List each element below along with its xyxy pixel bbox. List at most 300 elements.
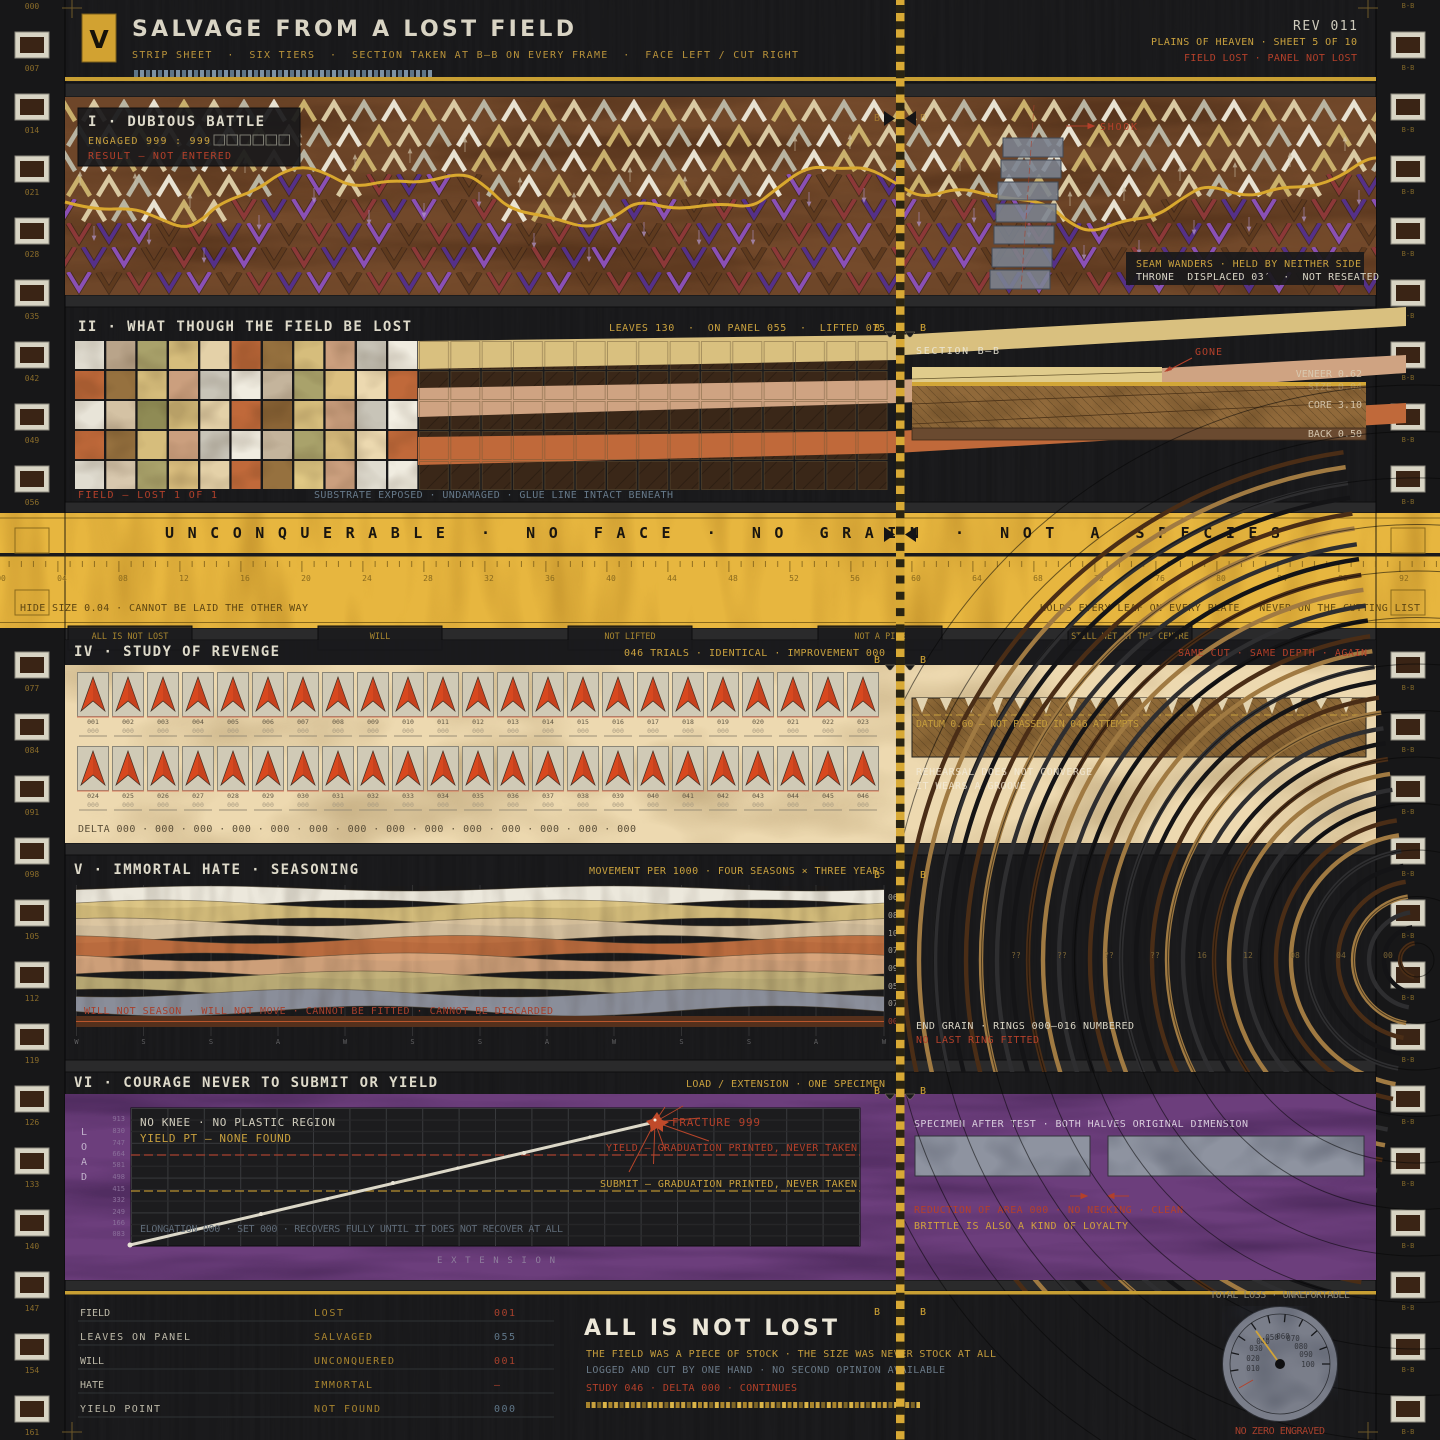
trial cards row 2: 039 (612, 792, 624, 800)
trial cards row 2: 000 (857, 801, 869, 809)
band: white stock (76, 886, 884, 908)
ring numbers: ?? (1057, 951, 1067, 960)
trial cards row 1: 011 (437, 718, 449, 726)
datum note: DATUM 0.60 — NOT PASSED IN 046 ATTEMPTS (916, 719, 1139, 730)
ledger table: YIELD POINT (80, 1404, 160, 1415)
trial cards row 2: 042 (717, 792, 729, 800)
ruler: 52 (789, 574, 799, 583)
trial cards row 1: 000 (472, 727, 484, 735)
right film strip: B-B (1402, 994, 1414, 1002)
trial cards row 2: 000 (717, 801, 729, 809)
left film strip: 119 (25, 1056, 39, 1065)
icon: V tile: V (89, 25, 109, 54)
load scale: 747 (112, 1139, 125, 1147)
trial cards row 2: 000 (157, 801, 169, 809)
trial cards row 1: 000 (367, 727, 379, 735)
veneer tile grid (75, 341, 417, 489)
banner statement: UNCONQUERABLE · NO FACE · NO GRAIN · NOT A SPECIES (165, 524, 1280, 542)
trial cards row 2: 000 (332, 801, 344, 809)
right film strip: B-B (1402, 312, 1414, 320)
section seam B-B (896, 0, 904, 1440)
season letters: A (276, 1038, 281, 1046)
extension axis label: E X T E N S I O N (437, 1256, 555, 1266)
seam note box: THRONE DISPLACED 03′ · NOT RESEATED (1136, 272, 1379, 283)
trial cards row 2: 029 (262, 792, 274, 800)
load scale: 332 (112, 1196, 125, 1204)
lifted strip: blush (418, 355, 1406, 417)
trial cards row 1: 023 (857, 718, 869, 726)
trial cards row 2: 036 (507, 792, 519, 800)
ring numbers: 08 (1290, 951, 1300, 960)
closing line 1: THE FIELD WAS A PIECE OF STOCK · THE SIZE WAS NEVER STOCK AT ALL (586, 1349, 996, 1360)
band end values: 063 (888, 893, 903, 902)
left film strip: 035 (25, 312, 39, 321)
trial cards row 2: 000 (472, 801, 484, 809)
left film strip: 161 (25, 1428, 39, 1437)
trial cards row 2: 000 (787, 801, 799, 809)
shook callout: SHOOK (1100, 122, 1137, 133)
ledger table: 001 (494, 1356, 515, 1367)
right film strip: B-B (1402, 1056, 1414, 1064)
subtitle: STRIP SHEET · SIX TIERS · SECTION TAKEN AT B—B ON EVERY FRAME · FACE LEFT / CUT RIGHT (132, 50, 798, 61)
trial cards row 1: 000 (262, 727, 274, 735)
specimen note: SPECIMEN AFTER TEST · BOTH HALVES ORIGINAL DIMENSION (914, 1119, 1248, 1130)
ledger table (78, 1308, 554, 1417)
barcode (134, 70, 434, 77)
ruler: 64 (972, 574, 982, 583)
load scale: 581 (112, 1161, 125, 1169)
trial cards row 1: 000 (192, 727, 204, 735)
ring numbers: ?? (1104, 951, 1114, 960)
yield line: YIELD — GRADUATION PRINTED, NEVER TAKEN (606, 1143, 857, 1154)
season letters: S (679, 1038, 684, 1046)
trial cards row 1: 002 (122, 718, 134, 726)
panel: V immortal hate seasoning: 056 (888, 982, 903, 991)
trial cards row 1 (77, 672, 879, 736)
ledger table: WILL (80, 1356, 104, 1367)
closing title: ALL IS NOT LOST (584, 1316, 837, 1341)
band: gold stock (76, 900, 884, 926)
panel: VI courage never to submit or yield (65, 1075, 1376, 1280)
panel: V immortal hate seasoning: 084 (888, 911, 903, 920)
tabs under the gold band: ALL IS NOT LOST (92, 632, 168, 642)
trial cards row 1: 000 (752, 727, 764, 735)
end grain note: END GRAIN · RINGS 000—016 NUMBERED (916, 1021, 1134, 1032)
ledger table: LOST (314, 1308, 343, 1319)
fracture burst (629, 1106, 709, 1172)
ruler: 84 (1277, 574, 1287, 583)
ledger table: UNCONQUERED (314, 1356, 394, 1367)
section markers B-B: B (920, 113, 926, 124)
closing line 3: STUDY 046 · DELTA 000 · CONTINUES (586, 1383, 797, 1394)
title box: ENGAGED 999 : 999 (88, 136, 210, 147)
ruler: 72 (1094, 574, 1104, 583)
trial cards row 2: 027 (192, 792, 204, 800)
tabs under the gold band: WILL (370, 632, 390, 642)
right film strip: B-B (1402, 1242, 1414, 1250)
gutters between tiers (65, 83, 1376, 1291)
trial cards row 2: 000 (192, 801, 204, 809)
trial cards row 1: 008 (332, 718, 344, 726)
trial cards row 1: 021 (787, 718, 799, 726)
ruler: 28 (423, 574, 433, 583)
section label: SECTION B—B (916, 346, 999, 357)
section markers B-B: B (874, 113, 880, 124)
brittle note: BRITTLE IS ALSO A KIND OF LOYALTY (914, 1221, 1128, 1232)
no zero note: NO ZERO ENGRAVED (1235, 1426, 1325, 1437)
trial cards row 1: 012 (472, 718, 484, 726)
icon: V tile (82, 14, 116, 62)
load scale: 415 (112, 1185, 125, 1193)
panel: V immortal hate seasoning: 098 (888, 964, 903, 973)
trial cards row 1: 005 (227, 718, 239, 726)
trial cards row 2: 044 (787, 792, 799, 800)
load extension chart: YIELD PT — NONE FOUND (140, 1132, 291, 1145)
ledger table: HATE (80, 1380, 104, 1391)
trial cards row 2: 025 (122, 792, 134, 800)
ruler: 60 (911, 574, 921, 583)
end grain rings (904, 450, 1415, 1291)
load scale: 913 (112, 1115, 125, 1123)
trial cards row 1: 000 (612, 727, 624, 735)
band: copper stock (76, 935, 884, 960)
trial cards row 1: 000 (332, 727, 344, 735)
section through the panel: CORE 3.10 (1308, 400, 1362, 411)
trial cards row 2: 000 (87, 801, 99, 809)
panel stats: LEAVES 130 · ON PANEL 055 · LIFTED 075 (609, 323, 885, 334)
panel: V immortal hate seasoning: 077 (888, 946, 903, 955)
gauge: 040 (1256, 1337, 1270, 1346)
rehearsal note: REHEARSAL DOES NOT CONVERGE (916, 767, 1092, 778)
section markers B-B: B (874, 1307, 880, 1318)
section through the panel: SIZE 0.04 (1308, 382, 1362, 393)
load extension chart (128, 1106, 860, 1248)
trial cards row 2: 000 (682, 801, 694, 809)
repeat note: SAME CUT · SAME DEPTH · AGAIN (1178, 648, 1367, 659)
ruler: 16 (240, 574, 250, 583)
season letters: W (882, 1038, 887, 1046)
throne stack of blocks (990, 105, 1063, 290)
load axis label: L (81, 1127, 87, 1138)
revision block (1151, 19, 1357, 64)
thin ring circles (904, 384, 1440, 1440)
left film strip: 021 (25, 188, 39, 197)
header rule (65, 77, 1376, 81)
ledger table: SALVAGED (314, 1332, 372, 1343)
trial cards row 2: 037 (542, 792, 554, 800)
trial cards row 1: 000 (157, 727, 169, 735)
gauge: 070 (1286, 1334, 1300, 1343)
gauge: 020 (1246, 1354, 1260, 1363)
ledger table: 055 (494, 1332, 515, 1343)
no last ring note: NO LAST RING FITTED (916, 1035, 1039, 1046)
trial cards row 1: 000 (507, 727, 519, 735)
panel: I dubious battle (65, 97, 1379, 295)
trial cards row 2: 000 (437, 801, 449, 809)
ruler: 12 (179, 574, 189, 583)
rehearsal note: IT WEARS A GROOVE (916, 781, 1026, 792)
ghost sprocket holes (15, 528, 1425, 615)
shook callout (1066, 122, 1137, 133)
ruler: 92 (1399, 574, 1409, 583)
ruler: 08 (118, 574, 128, 583)
trial cards row 1: 000 (787, 727, 799, 735)
right film strip: B-B (1402, 1118, 1414, 1126)
trial cards row 2: 046 (857, 792, 869, 800)
left film strip: 091 (25, 808, 39, 817)
trial cards row 2: 040 (647, 792, 659, 800)
heading: IV · STUDY OF REVENGE (74, 644, 279, 660)
left film strip: 105 (25, 932, 39, 941)
field lost note: FIELD — LOST 1 OF 1 (78, 490, 217, 501)
wandering seam line (65, 158, 1376, 230)
trial cards row 2: 035 (472, 792, 484, 800)
panel: V immortal hate seasoning (74, 864, 896, 1044)
specimen halves (915, 1136, 1364, 1176)
left film strip: 140 (25, 1242, 39, 1251)
panel: III unconquerable gold band (0, 513, 1440, 628)
season letters: W (612, 1038, 617, 1046)
trial cards row 2: 026 (157, 792, 169, 800)
load axis label: A (81, 1157, 87, 1168)
trial cards row 1: 018 (682, 718, 694, 726)
band: olive stock (76, 970, 884, 993)
gauge (1222, 1306, 1338, 1422)
right film strip: B-B (1402, 250, 1414, 258)
delta readout: DELTA 000 · 000 · 000 · 000 · 000 · 000 · 000 · 000 · 000 · 000 · 000 · 000 · 000 · 000 (78, 824, 636, 835)
left film strip: 098 (25, 870, 39, 879)
gauge: 080 (1294, 1342, 1308, 1351)
section through the panel: VENEER 0.62 (1296, 369, 1362, 380)
right film strip: B-B (1402, 1428, 1414, 1436)
left film strip: 049 (25, 436, 39, 445)
fracture label: FRACTURE 999 (672, 1116, 760, 1129)
right film strip: B-B (1402, 932, 1414, 940)
ring numbers: 04 (1336, 951, 1346, 960)
header (65, 14, 1376, 81)
tally bar (586, 1402, 920, 1408)
trial cards row 1: 019 (717, 718, 729, 726)
trial cards row 1: 004 (192, 718, 204, 726)
lifted strip: gold (418, 307, 1406, 369)
right film strip (1376, 0, 1440, 1440)
ruler (0, 561, 1440, 583)
ledger table: 001 (494, 1308, 515, 1319)
left film strip: 000 (25, 2, 39, 11)
title box: I · DUBIOUS BATTLE (88, 114, 264, 130)
chart notes: NO KNEE · NO PLASTIC REGION (140, 1116, 335, 1129)
trial cards row 2: 000 (122, 801, 134, 809)
season letters: S (747, 1038, 751, 1046)
right film strip: B-B (1402, 436, 1414, 444)
band: steel stock (76, 988, 884, 1016)
tabs under the gold band: NOT LIFTED (604, 632, 656, 642)
heading: VI · COURAGE NEVER TO SUBMIT OR YIELD (74, 1075, 437, 1091)
gauge heading: TOTAL LOSS · UNREPORTABLE (1210, 1290, 1350, 1301)
trial cards row 1: 000 (402, 727, 414, 735)
season letters: A (814, 1038, 819, 1046)
trial cards row 2: 000 (227, 801, 239, 809)
left film strip: 084 (25, 746, 39, 755)
ruler: 56 (850, 574, 860, 583)
trial cards row 2: 000 (402, 801, 414, 809)
trial cards row 1: 022 (822, 718, 834, 726)
seam note box (1126, 252, 1379, 285)
ruler: 80 (1216, 574, 1226, 583)
section markers B-B: B (920, 1307, 926, 1318)
panel: V immortal hate seasoning: 070 (888, 999, 903, 1008)
title box: RESULT — NOT ENTERED (88, 151, 231, 162)
left film strip: 028 (25, 250, 39, 259)
load scale: 249 (112, 1208, 125, 1216)
ledger table: IMMORTAL (314, 1380, 372, 1391)
ledger table: 000 (494, 1404, 515, 1415)
trial cards row 1: 013 (507, 718, 519, 726)
panel: IV study of revenge (65, 640, 1376, 843)
ring numbers: 00 (1383, 951, 1393, 960)
load scale: 166 (112, 1219, 125, 1227)
trial cards row 2: 043 (752, 792, 764, 800)
section markers B-B (874, 111, 926, 1318)
tabs under the gold band: NOT A PILE (854, 632, 906, 642)
section markers B-B: B (874, 870, 880, 881)
right film strip: B-B (1402, 808, 1414, 816)
trial cards row 2: 032 (367, 792, 379, 800)
right film strip: B-B (1402, 2, 1414, 10)
cream field (65, 665, 1376, 843)
trial cards row 2: 000 (752, 801, 764, 809)
trial cards row 1: 006 (262, 718, 274, 726)
gone callout: GONE (1195, 347, 1222, 358)
purple field (65, 1094, 1376, 1280)
section markers B-B: B (874, 655, 880, 666)
trial cards row 2: 000 (647, 801, 659, 809)
gauge: 050 (1265, 1333, 1279, 1342)
gauge: 100 (1301, 1360, 1315, 1369)
trial cards row 2: 034 (437, 792, 449, 800)
trial cards row 2: 028 (227, 792, 239, 800)
right film strip: B-B (1402, 870, 1414, 878)
load axis label: O (81, 1142, 87, 1153)
trial cards row 2: 000 (367, 801, 379, 809)
gauge: 090 (1299, 1350, 1313, 1359)
revision block: REV 011 (1293, 19, 1357, 34)
revision block: FIELD LOST · PANEL NOT LOST (1184, 53, 1357, 64)
ruler: 04 (57, 574, 67, 583)
ledger table: NOT FOUND (314, 1404, 380, 1415)
heading: II · WHAT THOUGH THE FIELD BE LOST (78, 319, 411, 335)
season letters: A (545, 1038, 550, 1046)
trial cards row 2: 038 (577, 792, 589, 800)
seam note box: SEAM WANDERS · HELD BY NEITHER SIDE (1136, 259, 1361, 270)
exposed substrate cells (419, 341, 888, 491)
ruler: 76 (1155, 574, 1165, 583)
trial cards row 2: 000 (577, 801, 589, 809)
submit line: SUBMIT — GRADUATION PRINTED, NEVER TAKEN (600, 1179, 857, 1190)
section through the panel: BACK 0.50 (1308, 429, 1362, 440)
right film strip: B-B (1402, 188, 1414, 196)
trial cards row 1: 017 (647, 718, 659, 726)
ring numbers: ?? (1150, 951, 1160, 960)
section through the panel (912, 367, 1366, 440)
trial cards row 1: 000 (122, 727, 134, 735)
trial cards row 1: 016 (612, 718, 624, 726)
load scale: 830 (112, 1127, 125, 1135)
hide size note: HIDE SIZE 0.04 · CANNOT BE LAID THE OTHER WAY (20, 603, 308, 614)
gone callout (1164, 347, 1222, 372)
load line (128, 1122, 655, 1248)
ruler: 48 (728, 574, 738, 583)
left film strip: 014 (25, 126, 39, 135)
trial cards row 2 (77, 746, 879, 810)
ring numbers: ?? (1011, 951, 1021, 960)
reduction note: REDUCTION OF AREA 000 · NO NECKING · CLEAN (914, 1205, 1183, 1216)
trial cards row 1: 000 (542, 727, 554, 735)
rehearsal note (916, 767, 1092, 792)
panel: V immortal hate seasoning: 000 (888, 1017, 903, 1026)
section markers B-B: B (920, 870, 926, 881)
left film strip: 133 (25, 1180, 39, 1189)
trial cards row 1: 003 (157, 718, 169, 726)
season grid (76, 885, 884, 1036)
trial cards row 2: 000 (542, 801, 554, 809)
substrate note: SUBSTRATE EXPOSED · UNDAMAGED · GLUE LINE INTACT BENEATH (314, 490, 673, 501)
tabs under the gold band (68, 626, 1192, 650)
trial cards row 1: 020 (752, 718, 764, 726)
tabs under the gold band: STILL WET AT THE CENTRE (1071, 632, 1189, 642)
gauge: 060 (1276, 1332, 1290, 1341)
closing arrows (1070, 1194, 1129, 1198)
section markers B-B: B (920, 655, 926, 666)
left film strip (0, 0, 65, 1440)
lifted strip: copper (418, 403, 1406, 465)
ledger table: LEAVES ON PANEL (80, 1332, 190, 1343)
left film strip: 007 (25, 64, 39, 73)
right film strip: B-B (1402, 1366, 1414, 1374)
season letters: S (141, 1038, 146, 1046)
section markers B-B: B (874, 1086, 880, 1097)
season letters: W (343, 1038, 348, 1046)
ruler: 20 (301, 574, 311, 583)
chart subtitle: LOAD / EXTENSION · ONE SPECIMEN (686, 1079, 885, 1090)
trial cards row 1: 000 (857, 727, 869, 735)
heading: V · IMMORTAL HATE · SEASONING (74, 862, 358, 878)
right film strip: B-B (1402, 1304, 1414, 1312)
panel: V immortal hate seasoning: 105 (888, 929, 903, 938)
ledger table: FIELD (80, 1308, 110, 1319)
trial cards row 2: 000 (822, 801, 834, 809)
ruler: 44 (667, 574, 677, 583)
trial cards row 1: 010 (402, 718, 414, 726)
ledger table: — (494, 1380, 501, 1391)
season letters: S (410, 1038, 415, 1046)
footer (65, 1290, 1376, 1437)
movement bands (76, 886, 884, 1016)
trial cards row 1: 000 (87, 727, 99, 735)
leaf note: HOLDS EVERY LEAF ON EVERY PLATE · NEVER ON THE CUTTING LIST (1040, 603, 1420, 614)
season letters: W (74, 1038, 79, 1046)
trial cards row 2: 000 (262, 801, 274, 809)
right film strip: B-B (1402, 1180, 1414, 1188)
trial cards row 2: 045 (822, 792, 834, 800)
closing line 2: LOGGED AND CUT BY ONE HAND · NO SECOND OPINION AVAILABLE (586, 1365, 945, 1376)
revision block: PLAINS OF HEAVEN · SHEET 5 OF 10 (1151, 37, 1357, 48)
trial cards row 1: 000 (227, 727, 239, 735)
load scale: 498 (112, 1173, 125, 1181)
trial cards row 2: 031 (332, 792, 344, 800)
no season note: WILL NOT SEASON · WILL NOT MOVE · CANNOT BE FITTED · CANNOT BE DISCARDED (84, 1006, 553, 1017)
right film strip: B-B (1402, 374, 1414, 382)
